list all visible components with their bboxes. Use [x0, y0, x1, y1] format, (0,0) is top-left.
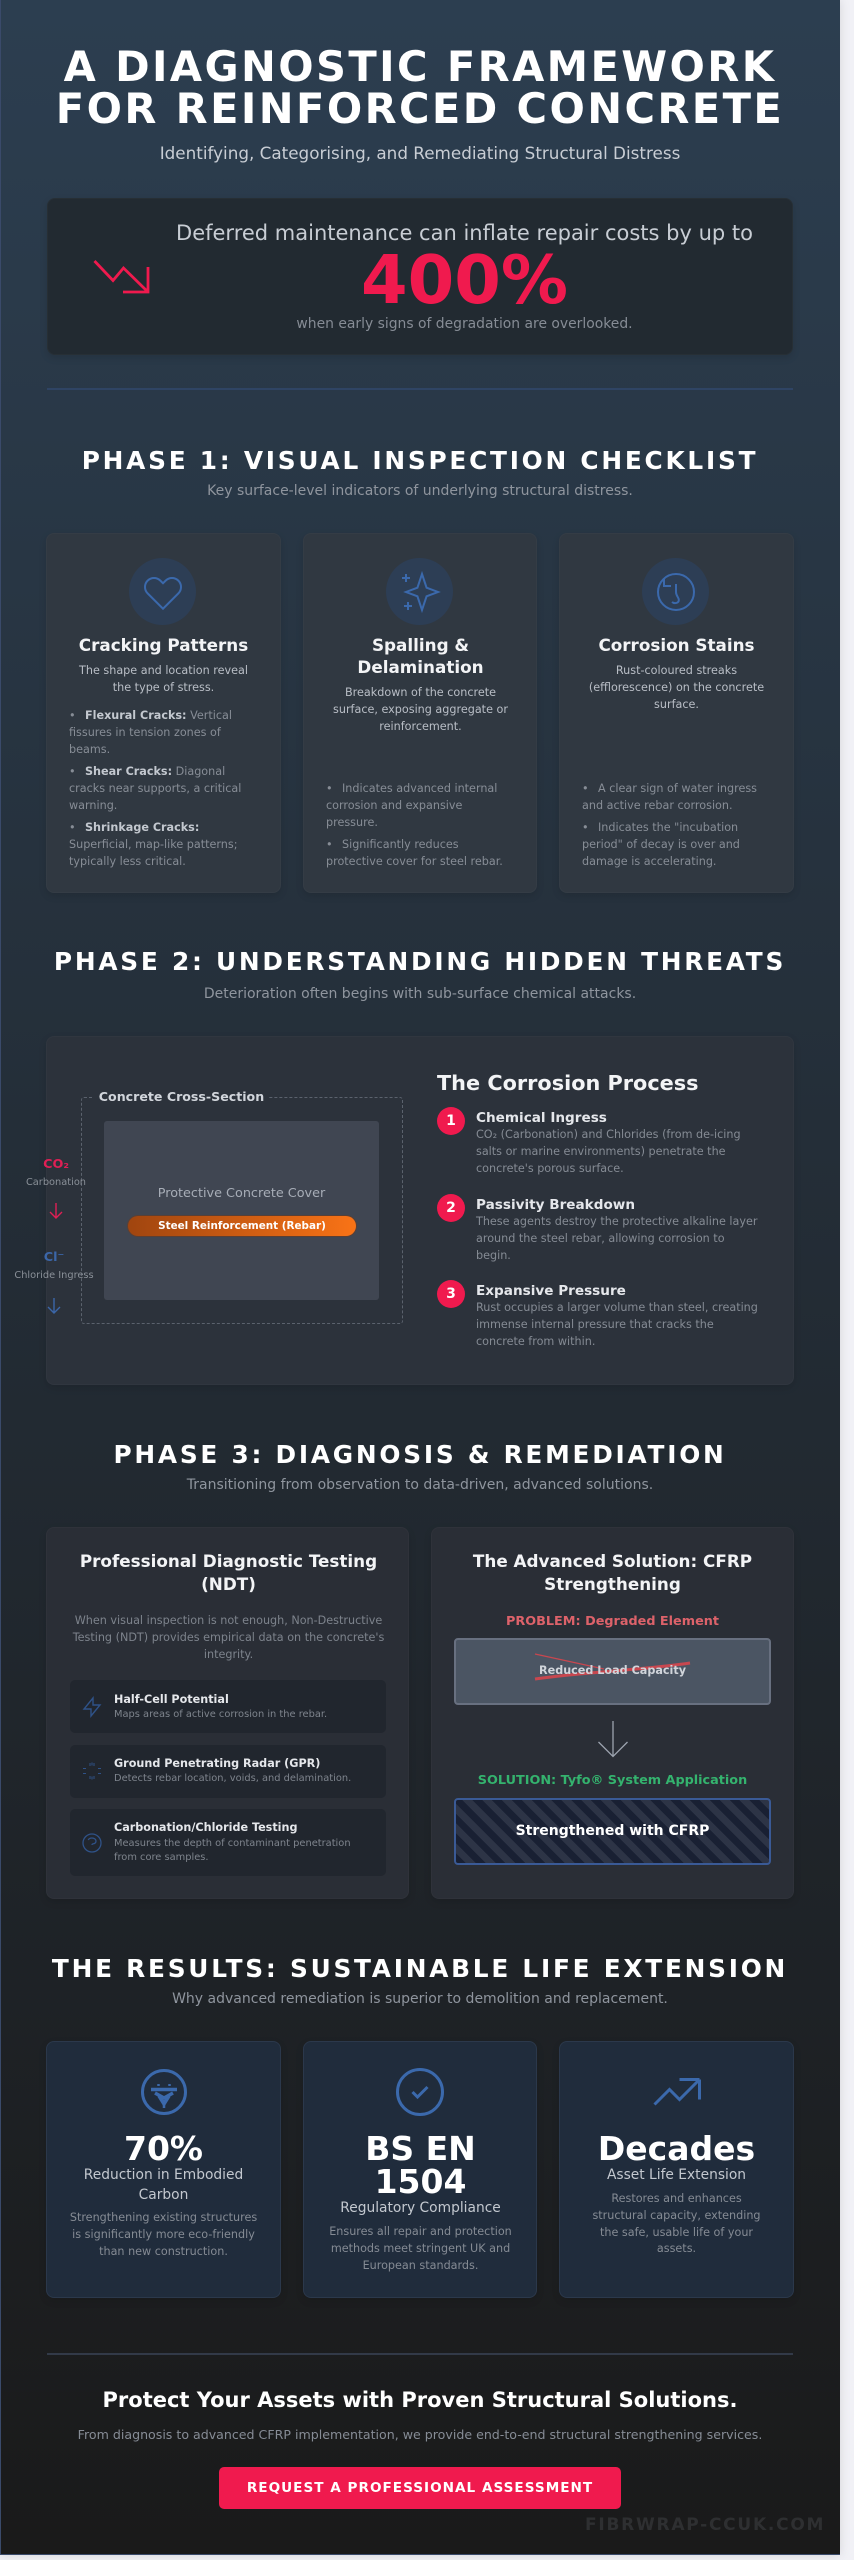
number	[437, 1194, 465, 1222]
bullet: shear: cracks near supports, a critical	[69, 782, 241, 795]
panel title: (NDT)	[201, 1574, 256, 1594]
step 1	[437, 1107, 741, 1175]
icon: question	[82, 1833, 102, 1853]
step text: Rust occupies a larger volume than steel, creating	[476, 1301, 758, 1314]
card description: Rust-coloured streaks	[616, 664, 737, 677]
stat description: than new construction.	[99, 2245, 228, 2258]
step text: immense internal pressure that cracks the	[476, 1318, 714, 1331]
icon: trending up	[654, 2078, 701, 2106]
panel: compliance	[303, 2041, 537, 2298]
card description: surface.	[654, 698, 699, 711]
panel title	[80, 1551, 377, 1594]
watermark: FIBRWRAP-CCUK.COM	[585, 2515, 825, 2535]
stat label: Carbon	[139, 2187, 188, 2203]
panel title	[472, 1551, 752, 1594]
panel description	[72, 1614, 384, 1661]
title: FOR REINFORCED CONCRETE	[56, 84, 784, 133]
bullet: water ingress	[582, 782, 757, 812]
bullet: flexural	[69, 709, 232, 756]
rebar	[128, 1216, 356, 1236]
card description: reinforcement.	[379, 720, 462, 733]
bullet: incubation: Indicates the "incubation	[598, 821, 738, 834]
card title: Cracking Patterns	[79, 635, 248, 655]
bullet: shrinkage	[69, 821, 238, 868]
bullet: water ingress: A clear sign of water ingress	[598, 782, 757, 795]
panel title: Professional Diagnostic Testing	[80, 1551, 377, 1571]
callout intro: Deferred maintenance can inflate repair costs by up to	[176, 221, 753, 245]
bullet: flexural: beams.	[69, 743, 110, 756]
method title: Half-Cell Potential	[114, 1693, 229, 1706]
button: REQUEST A PROFESSIONAL ASSESSMENT	[247, 2480, 593, 2496]
bullet: cover: Significantly reduces	[342, 838, 459, 851]
carbonation label: Carbonation	[26, 1177, 86, 1188]
card title	[357, 635, 484, 677]
card description	[589, 664, 764, 711]
results subheading: Why advanced remediation is superior to demolition and replacement.	[172, 1991, 668, 2007]
panel title: Strengthening	[544, 1574, 681, 1594]
arrow	[598, 1721, 628, 1758]
icon: clock	[642, 558, 709, 625]
stat value: BS EN	[365, 2129, 476, 2168]
icon: globe	[141, 2069, 187, 2115]
method text	[114, 1838, 351, 1863]
bullet: incubation: •	[582, 821, 589, 834]
step text: concrete's porous surface.	[476, 1162, 624, 1175]
bullet: flexural: •	[69, 709, 76, 722]
bullet: internal corrosion: •	[326, 782, 333, 795]
bullet: shrinkage: Shrinkage Cracks:	[85, 821, 199, 834]
icon: blue arrow	[48, 1298, 60, 1314]
panel title: The Advanced Solution: CFRP	[473, 1551, 752, 1571]
rebar: Steel Reinforcement (Rebar)	[158, 1220, 326, 1232]
problem label: PROBLEM: Degraded Element	[506, 1614, 719, 1629]
panel description: When visual inspection is not enough, Non-Destructive	[75, 1614, 382, 1627]
card description: The shape and location reveal	[79, 664, 248, 677]
closing heading: Protect Your Assets with Proven Structural Solutions.	[103, 2388, 737, 2412]
panel: corrosion stains	[559, 533, 794, 893]
stat description: the safe, usable life of your	[600, 2226, 753, 2239]
solution box	[454, 1798, 771, 1865]
method title: Carbonation/Chloride Testing	[114, 1821, 298, 1834]
stat value: 70%	[124, 2129, 203, 2168]
step text	[476, 1301, 758, 1348]
bullet: incubation	[582, 821, 740, 868]
card description: (efflorescence) on the concrete	[589, 681, 764, 694]
step 3	[437, 1280, 758, 1348]
card description: Breakdown of the concrete	[345, 686, 496, 699]
bullet: shrinkage: typically less critical.	[69, 855, 186, 868]
stat description	[592, 2192, 761, 2255]
callout figure: 400%	[361, 241, 568, 319]
method title: Ground Penetrating Radar (GPR)	[114, 1757, 320, 1770]
crack lines	[534, 1653, 690, 1680]
chloride label: Chloride Ingress	[14, 1270, 94, 1281]
problem text: Reduced Load Capacity	[539, 1664, 686, 1677]
bullet: shear: •	[69, 765, 76, 778]
bullet: internal corrosion: corrosion and expansive	[326, 799, 462, 812]
heading: results: THE RESULTS: SUSTAINABLE LIFE EXTENSION	[52, 1954, 788, 1983]
bullet: flexural: Flexural Cracks: Vertical	[85, 709, 232, 722]
card description	[333, 686, 508, 733]
card title: Corrosion Stains	[598, 635, 755, 655]
step text: These agents destroy the protective alkaline layer	[476, 1215, 757, 1228]
phase 3 subheading: Transitioning from observation to data-driven, advanced solutions.	[187, 1477, 653, 1493]
bullet: water ingress: and active rebar corrosion.	[582, 799, 733, 812]
method text: Detects rebar location, voids, and delamination.	[114, 1773, 351, 1784]
step 2	[437, 1194, 758, 1262]
bullet: shear: Shear Cracks: Diagonal	[85, 765, 225, 778]
bullet: shrinkage: •	[69, 821, 76, 834]
Cl label: Cl⁻	[44, 1250, 64, 1265]
bullet: internal corrosion: Indicates advanced internal	[342, 782, 497, 795]
bullet: cover: •	[326, 838, 333, 851]
stat label: Regulatory Compliance	[340, 2200, 501, 2216]
concrete cross-section	[81, 1097, 403, 1324]
callout note: when early signs of degradation are overlooked.	[296, 316, 633, 332]
icon: heart	[129, 558, 196, 625]
bullet: internal corrosion	[326, 782, 497, 829]
solution label: SOLUTION: Tyfo® System Application	[478, 1773, 747, 1788]
icon: trending down	[94, 260, 150, 294]
bullet: internal corrosion: pressure.	[326, 816, 378, 829]
icon: bolt	[82, 1696, 102, 1718]
stat description: Strengthening existing structures	[70, 2211, 257, 2224]
panel: cost callout	[47, 198, 793, 355]
card description: surface, exposing aggregate or	[333, 703, 508, 716]
step text: begin.	[476, 1249, 511, 1262]
subtitle: Identifying, Categorising, and Remediating Structural Distress	[160, 143, 680, 163]
panel: NDT	[46, 1527, 409, 1899]
step title: Expansive Pressure	[476, 1283, 626, 1299]
step text: around the steel rebar, allowing corrosion to	[476, 1232, 725, 1245]
panel: CFRP	[431, 1527, 794, 1899]
agent: CO2	[26, 1157, 86, 1219]
stat description	[70, 2211, 257, 2258]
step text	[476, 1128, 741, 1175]
panel: corrosion diagram	[46, 1036, 794, 1385]
panel description: integrity.	[204, 1648, 253, 1661]
card description	[78, 664, 248, 694]
number: 3	[446, 1286, 456, 1302]
stat description: European standards.	[363, 2259, 478, 2272]
heading: phase 3: PHASE 3: DIAGNOSIS & REMEDIATION	[113, 1440, 727, 1469]
card title: Delamination	[357, 657, 484, 677]
stat description	[329, 2225, 512, 2272]
number	[437, 1280, 465, 1308]
stat label: Reduction in Embodied	[84, 2167, 243, 2183]
card title: Spalling &	[372, 635, 469, 655]
card description: the type of stress.	[113, 681, 214, 694]
problem box	[454, 1638, 771, 1705]
number: 2	[446, 1200, 456, 1216]
step text: CO₂ (Carbonation) and Chlorides (from de-icing	[476, 1128, 741, 1141]
bullet: cover: protective cover for steel rebar.	[326, 855, 503, 868]
bullet: water ingress: •	[582, 782, 589, 795]
icon: check circle	[396, 2068, 444, 2116]
stat description: is significantly more eco-friendly	[72, 2228, 255, 2241]
cover label: Protective Concrete Cover	[158, 1186, 325, 1201]
stat description: Restores and enhances	[611, 2192, 742, 2205]
panel description: Testing (NDT) provides empirical data on the concrete's	[73, 1631, 384, 1644]
icon: sparkles	[386, 558, 453, 625]
bullet: shear: warning.	[69, 799, 117, 812]
step text	[476, 1215, 758, 1262]
section label: Concrete Cross-Section	[99, 1089, 264, 1104]
step title: Passivity Breakdown	[476, 1197, 635, 1213]
panel: embodied carbon	[46, 2041, 281, 2298]
stat description: assets.	[657, 2242, 696, 2255]
title	[56, 42, 784, 133]
method: carbonation testing	[70, 1809, 386, 1876]
stat description: methods meet stringent UK and	[331, 2242, 510, 2255]
process heading: The Corrosion Process	[437, 1071, 699, 1095]
panel: spalling	[303, 533, 537, 893]
bullet: incubation: damage is accelerating.	[582, 855, 716, 868]
method: half-cell	[70, 1680, 386, 1733]
solution box: Strengthened with CFRP	[516, 1823, 709, 1839]
title: A DIAGNOSTIC FRAMEWORK	[64, 42, 776, 91]
CO2 label: CO₂	[43, 1157, 69, 1172]
bullet: cover	[326, 838, 503, 868]
stat value: 1504	[375, 2162, 466, 2201]
phase 2 subheading: Deterioration often begins with sub-surface chemical attacks.	[204, 986, 636, 1002]
stat label: Asset Life Extension	[607, 2167, 746, 2183]
bullet: shrinkage: Superficial, map-like patterns;	[69, 838, 238, 851]
bullet: shear	[69, 765, 241, 812]
step text: salts or marine environments) penetrate the	[476, 1145, 726, 1158]
button	[219, 2467, 621, 2509]
bullet: incubation: period" of decay is over and	[582, 838, 740, 851]
method text: Maps areas of active corrosion in the rebar.	[114, 1709, 327, 1720]
agent: chloride	[14, 1250, 94, 1314]
concrete block	[104, 1121, 379, 1300]
heading: phase 2: PHASE 2: UNDERSTANDING HIDDEN THREATS	[54, 947, 786, 976]
stat value	[365, 2129, 476, 2201]
number	[437, 1107, 465, 1135]
closing text: From diagnosis to advanced CFRP implementation, we provide end-to-end structural strengthening services.	[78, 2427, 762, 2442]
heading: phase 1: PHASE 1: VISUAL INSPECTION CHECKLIST	[82, 446, 758, 475]
number: 1	[446, 1113, 456, 1129]
phase 1 subheading: Key surface-level indicators of underlying structural distress.	[207, 483, 633, 499]
method: GPR	[70, 1745, 386, 1798]
icon: radar	[83, 1762, 101, 1780]
step title: Chemical Ingress	[476, 1110, 607, 1126]
method text: from core samples.	[114, 1852, 209, 1863]
step text: concrete from within.	[476, 1335, 595, 1348]
icon: red arrow	[50, 1203, 62, 1219]
method text: Measures the depth of contaminant penetration	[114, 1838, 351, 1849]
stat description: structural capacity, extending	[592, 2209, 761, 2222]
panel: cracking patterns	[46, 533, 281, 893]
stat label	[84, 2167, 243, 2203]
stat description: Ensures all repair and protection	[329, 2225, 512, 2238]
panel: asset life	[559, 2041, 794, 2298]
stat value: Decades	[598, 2129, 755, 2168]
bullet: flexural: fissures in tension zones of	[69, 726, 221, 739]
